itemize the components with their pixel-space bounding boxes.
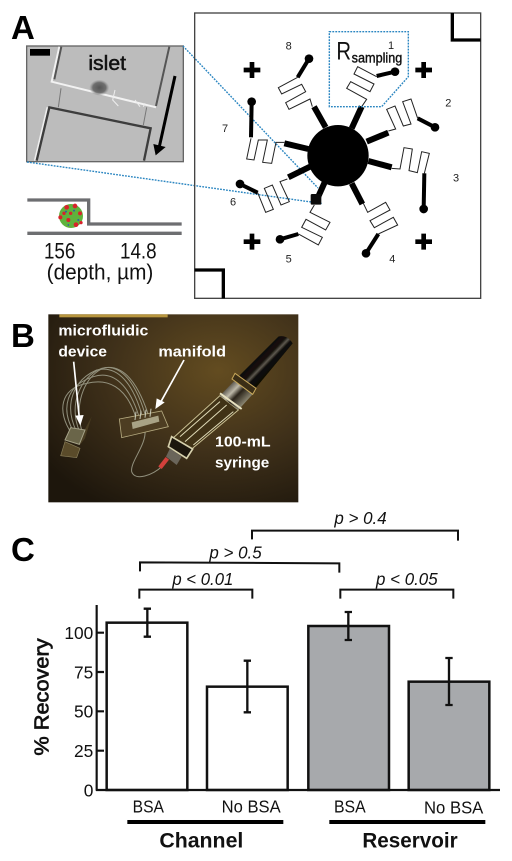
channel numbers: 3 (453, 172, 459, 184)
outlet channels and ports (240, 59, 435, 253)
panel label: B: B (11, 317, 35, 354)
panel: microfluidic device layout (195, 13, 481, 298)
device outline (195, 13, 481, 298)
p-value labels: p < 0.05 (375, 569, 439, 589)
syringe glass barrel (173, 396, 238, 451)
syringe black tube (239, 336, 293, 390)
group underlines (127, 820, 485, 824)
group labels: Channel (159, 828, 243, 852)
thick channel arms to central reservoir (284, 107, 392, 204)
icon: islet cell cluster (58, 204, 83, 228)
x-axis category labels: No BSA (222, 797, 281, 817)
panel label: C: C (11, 531, 35, 568)
tubing (63, 367, 162, 477)
channel numbers: 2 (445, 98, 451, 110)
manifold block (119, 411, 168, 438)
channel numbers (222, 40, 459, 266)
depth labels (44, 238, 157, 284)
panel label: A: A (11, 9, 35, 46)
y-axis tick labels: 75 (74, 662, 93, 682)
depth labels: 156 (44, 238, 75, 263)
arrow: flow direction (153, 76, 175, 155)
depth labels: (depth, µm) (47, 259, 153, 284)
serpentine resistors (247, 67, 429, 245)
bar: Channel No BSA (207, 687, 288, 790)
channel numbers: 8 (286, 41, 292, 53)
y-axis tick labels: 50 (74, 702, 93, 722)
photo labels: manifold (158, 344, 226, 361)
photo labels (58, 323, 271, 472)
channel numbers: 6 (230, 196, 236, 208)
x-axis category labels: BSA (334, 797, 366, 817)
label: islet: islet (88, 53, 126, 75)
syringe hub and red tip (168, 437, 193, 458)
photo labels: 100-mL (215, 434, 271, 451)
alignment corner marks (195, 13, 481, 298)
y-axis tick labels: 100 (64, 623, 93, 643)
p-value labels: p < 0.01 (171, 569, 233, 589)
bar: Reservoir BSA (308, 626, 389, 790)
syringe plunger (220, 377, 255, 410)
group labels: Reservoir (362, 828, 458, 852)
central reservoir (307, 125, 369, 186)
arrow: to microfluidic device (74, 362, 84, 426)
callout: R sampling region: R (336, 37, 351, 65)
bar: Channel BSA (107, 623, 187, 790)
callout: R sampling region: sampling (352, 50, 402, 66)
photo labels: syringe (215, 455, 269, 472)
y-axis tick labels: 25 (74, 741, 93, 761)
panel: islet micrograph inset (27, 46, 183, 162)
bar: Reservoir No BSA (409, 682, 489, 790)
error bars (144, 609, 453, 712)
significance brackets (139, 531, 458, 599)
y-axis tick labels: 0 (84, 780, 93, 800)
photo labels: device (58, 344, 107, 361)
x-axis category labels: BSA (133, 797, 164, 817)
panel: % recovery bar chart (31, 508, 500, 852)
arrow: to manifold (155, 360, 184, 409)
p-value labels (171, 508, 439, 589)
x-axis category labels (133, 797, 484, 818)
channel numbers: 1 (388, 40, 394, 52)
channel numbers: 7 (222, 123, 228, 135)
depth labels: 14.8 (120, 238, 157, 263)
channel numbers: 5 (286, 253, 292, 265)
y-axis tick labels (64, 623, 93, 800)
channel numbers: 4 (389, 254, 395, 266)
callout: R sampling region (329, 32, 408, 107)
panel: photograph of device, manifold and syringe (48, 314, 298, 502)
chart axes (96, 605, 500, 791)
diagram: islet in channel cross-section (27, 200, 182, 284)
group labels (159, 828, 458, 852)
p-value labels: p > 0.4 (333, 508, 387, 528)
islet trap square (311, 194, 321, 205)
x-axis category labels: No BSA (424, 798, 484, 818)
y-axis title: % Recovery (31, 638, 53, 756)
chip (61, 442, 80, 458)
dotted zoom guide lines (27, 46, 322, 204)
photo labels: microfluidic (58, 323, 148, 340)
alignment crosses (244, 62, 432, 250)
p-value labels: p > 0.5 (208, 542, 263, 562)
scale bar (30, 49, 50, 56)
